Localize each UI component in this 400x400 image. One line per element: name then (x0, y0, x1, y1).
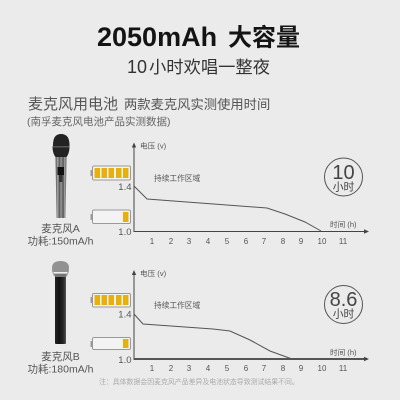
chart A (90, 140, 369, 246)
x axis ticks (150, 237, 348, 246)
x axis ticks: 8 (281, 237, 286, 246)
x axis ticks: 8 (281, 364, 286, 373)
badge 10 hours (324, 158, 362, 196)
battery low A (90, 210, 130, 224)
y axis title: 电压 (v) (140, 140, 167, 150)
subtitle: 10 (127, 57, 147, 77)
x axis title: 时间 (h) (330, 347, 357, 357)
x axis ticks: 5 (225, 364, 230, 373)
section heading: 两款麦克风实测使用时间 (124, 96, 270, 112)
badge 10 hours: 10 (332, 162, 355, 184)
microphone B (52, 261, 69, 344)
x axis ticks: 10 (318, 237, 327, 246)
x axis ticks: 5 (225, 237, 230, 246)
footnote: 注：具体数据会因麦克风产品差异及电池状态导致测试结果不同。 (99, 377, 299, 386)
badge 8.6 hours: 小时 (333, 308, 354, 320)
x axis ticks: 11 (339, 237, 348, 246)
x axis ticks: 9 (299, 364, 304, 373)
label microphone B: 功耗:180mA/h (28, 364, 94, 376)
x axis ticks: 6 (244, 237, 249, 246)
section heading (28, 96, 270, 113)
chart B (90, 268, 369, 373)
voltage curve (134, 314, 292, 359)
region label: 持续工作区域 (154, 300, 200, 310)
title: 大容量 (228, 24, 300, 52)
label microphone B: 麦克风B (41, 351, 80, 363)
title: 2050mAh (97, 22, 217, 52)
subtitle: 小时欢唱一整夜 (149, 57, 270, 77)
y axis labels: 1.4 (118, 182, 132, 193)
x axis ticks: 11 (339, 364, 348, 373)
x axis ticks: 2 (169, 237, 174, 246)
x axis ticks: 4 (206, 237, 211, 246)
axes (132, 270, 369, 361)
x axis ticks: 1 (150, 364, 155, 373)
x axis ticks: 3 (187, 364, 192, 373)
y axis labels: 1.4 (118, 310, 132, 320)
x axis ticks: 4 (206, 364, 211, 373)
section heading: 麦克风用电池 (28, 96, 118, 113)
y axis labels: 1.0 (118, 227, 132, 238)
y axis labels: 1.0 (118, 355, 132, 366)
battery low B (90, 338, 130, 350)
voltage curve (134, 186, 321, 231)
badge 8.6 hours: 8.6 (330, 289, 357, 311)
x axis ticks: 2 (169, 364, 174, 373)
battery full A (90, 166, 130, 180)
x axis ticks: 10 (318, 364, 327, 373)
x axis ticks: 7 (262, 237, 267, 246)
y axis labels (118, 310, 132, 366)
x axis ticks: 6 (244, 364, 249, 373)
x axis ticks: 7 (262, 364, 267, 373)
x axis ticks (150, 364, 348, 373)
region label: 持续工作区域 (154, 173, 200, 183)
title (97, 22, 300, 52)
label microphone A: 功耗:150mA/h (28, 236, 94, 248)
badge 10 hours: 小时 (333, 180, 354, 194)
microphone A (52, 134, 70, 218)
battery full B (90, 294, 130, 307)
x axis title: 时间 (h) (330, 219, 357, 229)
y axis labels (118, 182, 132, 238)
axes (132, 142, 369, 234)
label microphone A: 麦克风A (41, 223, 80, 235)
label microphone A (28, 223, 94, 248)
badge 8.6 hours (324, 286, 362, 324)
y axis title: 电压 (v) (140, 268, 167, 278)
x axis ticks: 1 (150, 237, 155, 246)
section note: (南孚麦克风电池产品实测数据) (27, 115, 170, 128)
x axis ticks: 3 (187, 237, 192, 246)
label microphone B (28, 351, 94, 376)
x axis ticks: 9 (299, 237, 304, 246)
